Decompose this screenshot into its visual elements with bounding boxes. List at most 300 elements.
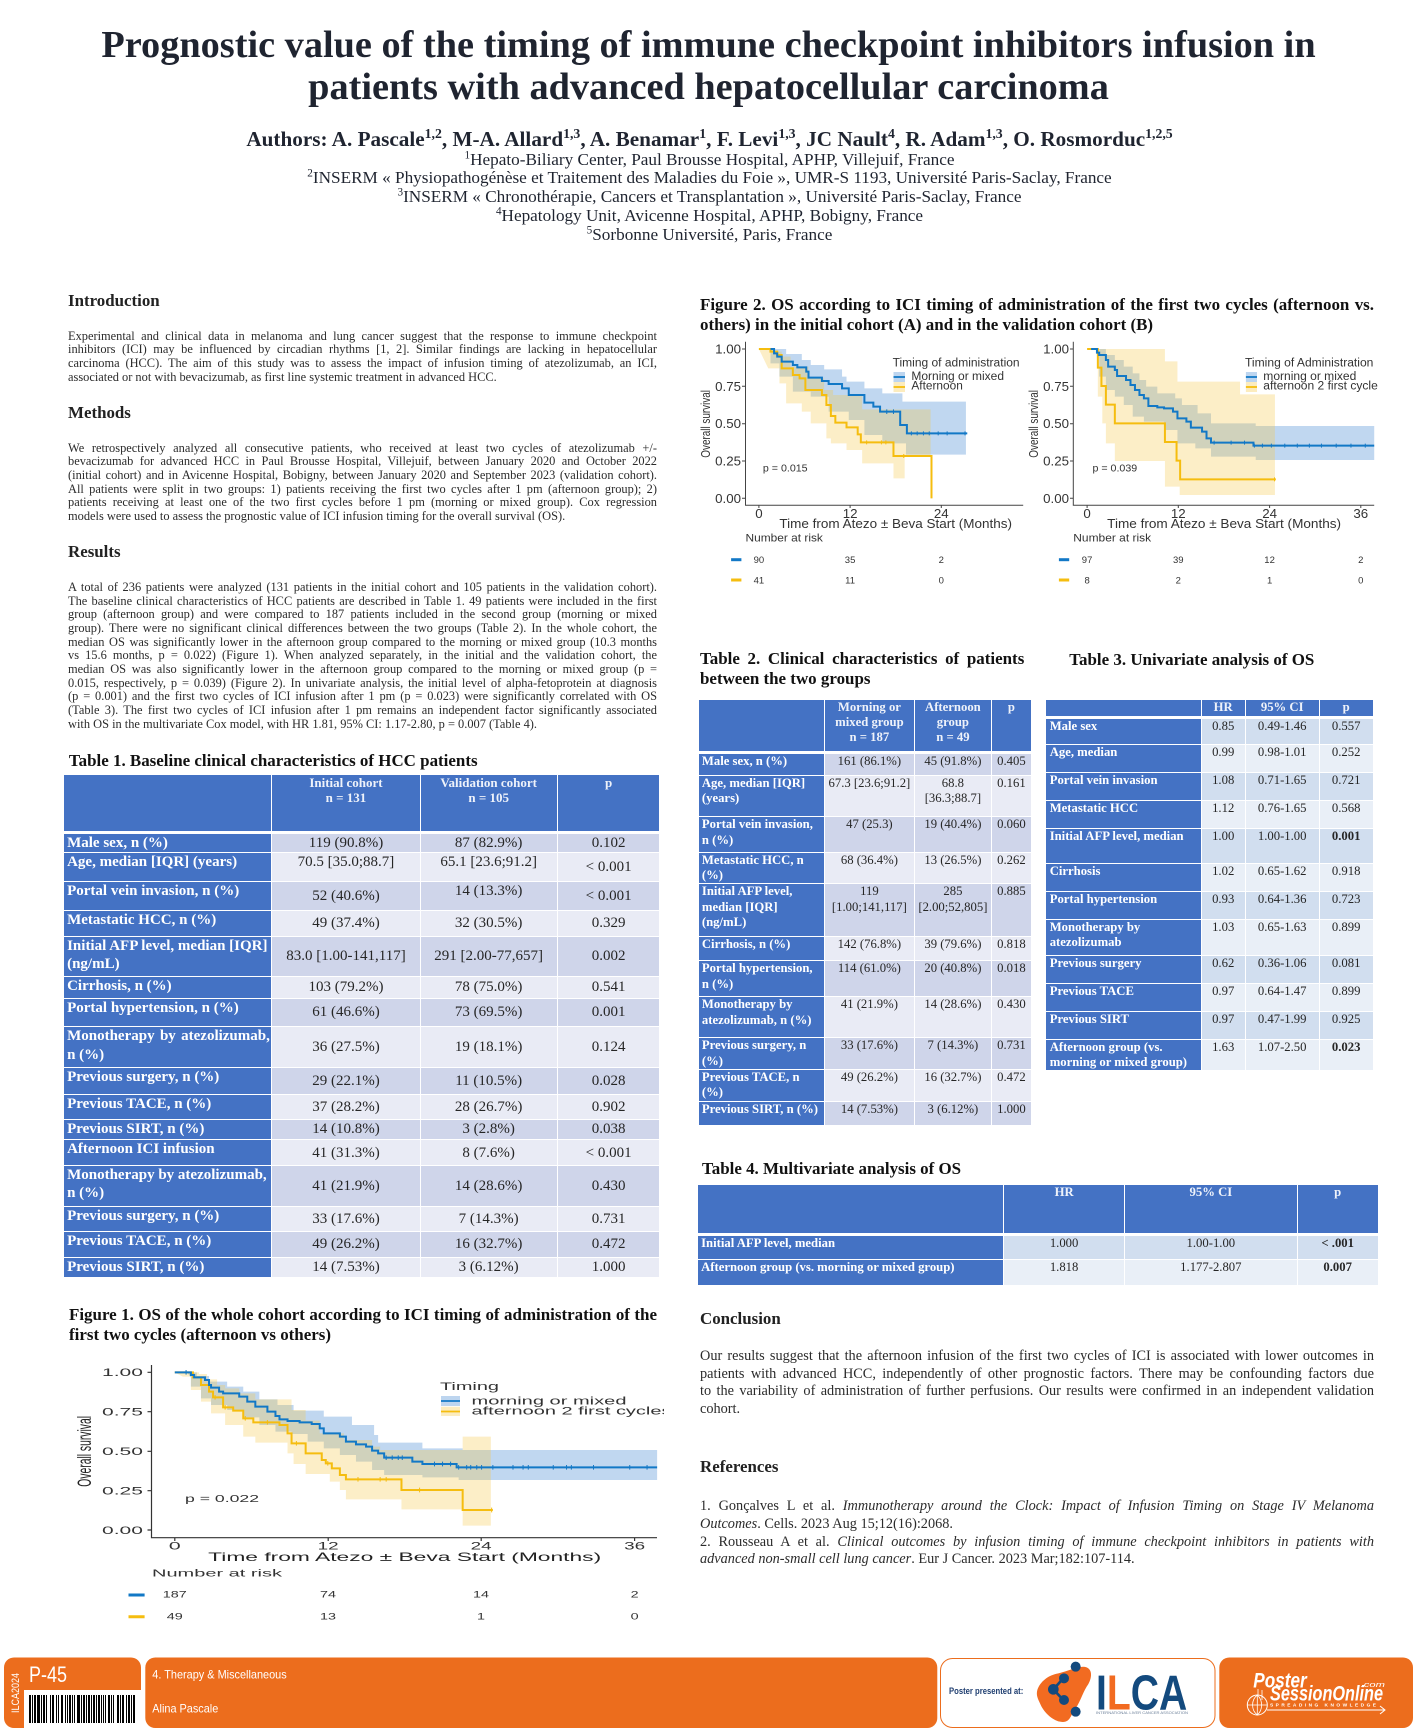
caption: figure 1: Figure 1. OS of the whole cohort according to ICI timing of administration of the — [69, 1305, 657, 1324]
caption: figure 2 — [700, 295, 1374, 334]
caption: table 1: Table 1. Baseline clinical characteristics of HCC patients — [69, 751, 478, 770]
table 1: baseline characteristics: Initial cohort — [309, 775, 383, 790]
heading: references: References — [700, 1457, 778, 1476]
risk table: figure 1: 74 — [320, 1590, 336, 1601]
text: conclusion — [700, 1348, 1374, 1417]
table 1: baseline characteristics: Initial AFP level, median [IQR] — [67, 938, 268, 954]
legend: panel A: Afternoon — [911, 381, 963, 393]
table 2: clinical characteristics between groups: 0.430 — [997, 997, 1026, 1011]
table 3: univariate analysis: 0.47-1.99 — [1258, 1012, 1306, 1026]
table 3: univariate analysis: 1.00-1.00 — [1258, 829, 1306, 843]
table 3: univariate analysis: 1.00 — [1212, 829, 1234, 843]
table 1: baseline characteristics: Previous TACE, n (%) — [67, 1096, 211, 1112]
table 1: baseline characteristics: 52 (40.6%) — [312, 888, 380, 904]
table 1: baseline characteristics: Previous TACE, n (%) — [67, 1233, 211, 1249]
table 4: multivariate analysis: HR — [1055, 1184, 1074, 1198]
table 2: clinical characteristics between groups — [699, 700, 1031, 1125]
caption: table 4: Table 4. Multivariate analysis of OS — [702, 1159, 961, 1178]
chart: figure 2 survival curves — [700, 342, 1378, 586]
risk table: panel A: 35 — [845, 555, 855, 566]
table 1: baseline characteristics: 119 (90.8%) — [309, 835, 383, 851]
table 1: baseline characteristics: 0.102 — [592, 835, 625, 851]
heading: conclusion: Conclusion — [700, 1309, 781, 1328]
title: patients with advanced hepatocellular carcinoma — [308, 66, 1109, 108]
footer: poster id box — [4, 1658, 141, 1728]
axis labels: panel A: 0.75 — [715, 379, 741, 394]
axis labels: panel A — [699, 342, 1012, 531]
table 2: clinical characteristics between groups: 7 (14.3%) — [928, 1038, 978, 1052]
axis labels: panel A: p = 0.015 — [763, 463, 808, 474]
axis labels: panel A: 0.00 — [715, 491, 741, 506]
table 3: univariate analysis: 0.557 — [1332, 719, 1360, 733]
axis labels: panel A: 0.25 — [715, 454, 741, 468]
table 2: clinical characteristics between groups: (%) — [702, 868, 723, 882]
table 1: baseline characteristics: 0.038 — [592, 1121, 625, 1137]
axis labels: panel B: 0.75 — [1043, 379, 1069, 394]
table 1: baseline characteristics: 0.902 — [592, 1099, 625, 1115]
table 1: baseline characteristics: < 0.001 — [586, 888, 632, 904]
table 3: univariate analysis: 0.899 — [1332, 920, 1360, 934]
caption: figure 2: Figure 2. OS according to ICI timing of administration of the first two cycles (afternoon vs. — [700, 295, 1374, 314]
table 1: baseline characteristics: Previous surgery, n (%) — [67, 1069, 219, 1085]
risk table: panel A: 11 — [845, 575, 855, 586]
text: results: group). There were no significant clinical differences between the two groups (Table 2). In the whole cohort, the — [68, 621, 657, 635]
text: conclusion: patients with advanced HCC, independently of other prognostic factors. There may be confounding factors due — [700, 1366, 1374, 1382]
risk table: figure 1: 14 — [473, 1590, 489, 1601]
heading: methods: Methods — [68, 403, 131, 422]
table 1: baseline characteristics: 0.028 — [592, 1073, 625, 1089]
table 1: baseline characteristics: Afternoon ICI infusion — [67, 1141, 215, 1157]
footer: PosterSessionOnline logo box: Poster — [1253, 1670, 1308, 1693]
table 1: baseline characteristics: Metastatic HCC, n (%) — [67, 912, 216, 928]
axis labels: figure 1: Overall survival — [74, 1416, 96, 1487]
axis labels: figure 1: 12 — [318, 1540, 339, 1552]
axis labels: panel B: 0 — [1083, 506, 1091, 521]
table 2: clinical characteristics between groups: 285 — [943, 884, 962, 898]
table 1: baseline characteristics: 32 (30.5%) — [455, 915, 522, 931]
risk table: panel B: 12 — [1264, 555, 1275, 566]
table 1: baseline characteristics: p — [605, 775, 612, 790]
table 1: baseline characteristics: 0.731 — [592, 1211, 625, 1227]
risk table: figure 1: 49 — [167, 1611, 183, 1622]
table 2: clinical characteristics between groups: 47 (25.3) — [846, 817, 893, 831]
risk table: panel B: 39 — [1173, 555, 1184, 566]
axis labels: figure 1: 0.50 — [102, 1446, 143, 1458]
axis labels: figure 1: 0.00 — [102, 1525, 143, 1537]
axes: figure 1 — [148, 1365, 657, 1541]
table 1: baseline characteristics: Monotherapy by atezolizumab, — [67, 1167, 267, 1183]
table 4: multivariate analysis: Initial AFP level, median — [701, 1236, 835, 1250]
footer: category and presenter box — [145, 1658, 937, 1728]
text: results: median OS was also significantly lower in the afternoon group compared to the morning or mixed group (p = — [68, 662, 657, 676]
risk table: panel B — [1059, 533, 1363, 586]
table 3: univariate analysis: 0.723 — [1332, 892, 1360, 906]
table 2: clinical characteristics between groups: 142 (76.8%) — [838, 937, 901, 951]
text: methods: We retrospectively analyzed all consecutive patients, who received at least two cycles of atezolizumab +/- — [68, 440, 657, 454]
table 1: baseline characteristics: Previous SIRT, n (%) — [67, 1259, 204, 1275]
caption: table 3: Table 3. Univariate analysis of OS — [1069, 650, 1314, 669]
table 2: clinical characteristics between groups: 161 (86.1%) — [838, 754, 901, 768]
table 3: univariate analysis: Metastatic HCC — [1050, 801, 1138, 815]
table 3: univariate analysis: 0.97 — [1212, 984, 1234, 998]
text: conclusion: Our results suggest that the afternoon infusion of the first two cycles of ICI is associated with lower outcomes in — [700, 1348, 1374, 1364]
table 3: univariate analysis: 0.76-1.65 — [1258, 801, 1306, 815]
heading: results: Results — [68, 542, 121, 561]
risk table: figure 1: 13 — [320, 1611, 336, 1622]
table 3: univariate analysis: Monotherapy by — [1050, 920, 1140, 934]
table 1: baseline characteristics: 291 [2.00-77,657] — [434, 948, 543, 964]
axis labels: panel B: 1.00 — [1043, 342, 1069, 356]
risk table: panel A: 90 — [754, 555, 764, 566]
table 2: clinical characteristics between groups: 0.472 — [997, 1070, 1026, 1084]
table 3: univariate analysis: 0.64-1.36 — [1258, 892, 1306, 906]
table 2: clinical characteristics between groups: (years) — [702, 791, 739, 805]
table 2: clinical characteristics between groups: group — [937, 715, 969, 729]
affiliations: 2INSERM « Physiopathogénèse et Traitement des Maladies du Foie », UMR-S 1193, Université Paris-Saclay, France — [307, 168, 1112, 187]
table 2: clinical characteristics between groups: (%) — [702, 1054, 723, 1068]
table 1: baseline characteristics: 14 (28.6%) — [455, 1178, 522, 1194]
table 3: univariate analysis: 1.63 — [1212, 1040, 1234, 1054]
table 4: multivariate analysis: 1.00-1.00 — [1187, 1236, 1235, 1250]
table 4: multivariate analysis: p — [1334, 1184, 1341, 1198]
axis labels: panel A: 0 — [755, 506, 763, 521]
table 1: baseline characteristics: 41 (21.9%) — [312, 1178, 380, 1194]
table 1: baseline characteristics: 83.0 [1.00-141,117] — [286, 948, 406, 964]
risk table: figure 1: 0 — [631, 1611, 639, 1622]
chart: figure 1 survival curves — [74, 1365, 664, 1622]
table 1: baseline characteristics: 3 (6.12%) — [459, 1259, 519, 1275]
caption: table 2: Table 2. Clinical characteristics of patients — [700, 649, 1024, 668]
affiliations — [307, 149, 1112, 244]
table 1: baseline characteristics: 49 (26.2%) — [312, 1236, 380, 1252]
table 2: clinical characteristics between groups: 0.885 — [997, 884, 1026, 898]
affiliations: 5Sorbonne Université, Paris, France — [587, 224, 832, 244]
text: results: median OS was significantly lower in the afternoon group compared to the morning or mixed group (10.3 months — [68, 635, 657, 649]
table 2: clinical characteristics between groups: Male sex, n (%) — [702, 754, 787, 768]
table 1: baseline characteristics: < 0.001 — [586, 859, 632, 875]
text: references: Outcomes. Cells. 2023 Aug 15;12(16):2068. — [700, 1516, 953, 1532]
table 4: multivariate analysis: 1.818 — [1050, 1260, 1078, 1274]
curves: figure 1 — [175, 1370, 657, 1526]
axis labels: figure 1: 0.75 — [102, 1406, 143, 1418]
risk table: panel B: 0 — [1358, 575, 1363, 586]
table 2: clinical characteristics between groups: Metastatic HCC, n — [702, 853, 804, 867]
table 3: univariate analysis: Previous surgery — [1050, 956, 1141, 970]
text: results: The baseline clinical characteristics of HCC patients are described in Table 1. 49 patients were included in the first — [68, 594, 657, 608]
table 4: multivariate analysis: 95% CI — [1190, 1184, 1232, 1198]
table 2: clinical characteristics between groups: Portal vein invasion, — [702, 817, 813, 831]
table 2: clinical characteristics between groups: (%) — [702, 1085, 723, 1099]
table 2: clinical characteristics between groups: 19 (40.4%) — [924, 817, 981, 831]
table 1: baseline characteristics: 1.000 — [592, 1259, 625, 1275]
table 4: multivariate analysis: 0.007 — [1323, 1260, 1352, 1274]
table 2: clinical characteristics between groups: n (%) — [702, 833, 733, 847]
table 2: clinical characteristics between groups: Age, median [IQR] — [702, 776, 805, 790]
table 1: baseline characteristics: n = 131 — [326, 790, 366, 805]
table 1: baseline characteristics: n (%) — [67, 1047, 104, 1063]
table 2: clinical characteristics between groups: [1.00;141,117] — [832, 900, 907, 914]
caption: figure 1 — [69, 1305, 657, 1344]
text: methods: (initial cohort) and in Avicenne Hospital, Bobigny, between January 2020 and September 2023 (validation cohort). — [68, 468, 657, 482]
footer: ILCA logo box: ILCA — [1096, 1666, 1187, 1720]
text: introduction — [68, 329, 657, 384]
footer: PosterSessionOnline logo box: SessionOnline — [1270, 1683, 1383, 1706]
footer: PosterSessionOnline logo box: SPREADING KNOWLEDGE — [1270, 1702, 1377, 1708]
axis labels: panel B: 24 — [1262, 506, 1277, 521]
table 2: clinical characteristics between groups: Previous SIRT, n (%) — [702, 1102, 818, 1116]
table 2: clinical characteristics between groups: 20 (40.8%) — [924, 961, 981, 975]
axis labels: panel B: 0.00 — [1043, 491, 1069, 506]
table 1: baseline characteristics: 0.430 — [592, 1178, 625, 1194]
table 2: clinical characteristics between groups: 13 (26.5%) — [924, 853, 981, 867]
table 1: baseline characteristics: 11 (10.5%) — [455, 1073, 522, 1089]
table 1: baseline characteristics: 14 (10.8%) — [312, 1121, 380, 1137]
table 1: baseline characteristics: Portal hypertension, n (%) — [67, 1000, 239, 1016]
table 3: univariate analysis: HR — [1214, 700, 1233, 714]
axis labels: figure 1: 0.25 — [102, 1486, 143, 1498]
table 2: clinical characteristics between groups: 0.018 — [997, 961, 1026, 975]
authors: Authors: A. Pascale1,2, M-A. Allard1,3, A. Benamar1, F. Levi1,3, JC Nault4, R. Adam1,3, O. Rosmorduc1,2,5 — [246, 126, 1173, 151]
table 3: univariate analysis: 0.93 — [1212, 892, 1234, 906]
table 2: clinical characteristics between groups: 14 (7.53%) — [841, 1102, 898, 1116]
legend: panel B — [1245, 358, 1378, 393]
axis labels: panel A: 0.50 — [715, 416, 741, 431]
table 1: baseline characteristics: Cirrhosis, n (%) — [67, 978, 172, 994]
table 3: univariate analysis: 0.899 — [1332, 984, 1360, 998]
table 1: baseline characteristics: Male sex, n (%) — [67, 835, 168, 851]
table 1: baseline characteristics: 0.124 — [592, 1039, 625, 1055]
table 3: univariate analysis: 0.721 — [1332, 773, 1360, 787]
text: results: A total of 236 patients were analyzed (131 patients in the initial cohort and 105 patients in the validation cohort). — [68, 580, 657, 594]
legend: figure 1: afternoon 2 first cycles — [472, 1406, 664, 1418]
table 1: baseline characteristics: 0.472 — [592, 1236, 625, 1252]
curves: panel A — [759, 349, 967, 498]
barcode — [29, 1695, 135, 1723]
table 1: baseline characteristics: 36 (27.5%) — [312, 1039, 380, 1055]
axis labels: panel B: 0.25 — [1043, 454, 1069, 468]
icon: ILCA logo mark — [1037, 1662, 1091, 1722]
risk table: panel B: 2 — [1176, 575, 1181, 586]
legend: panel A: Timing of administration — [893, 358, 1020, 370]
heading: introduction: Introduction — [68, 291, 160, 310]
table 1: baseline characteristics: 0.002 — [592, 948, 625, 964]
text: results: with OS in the multivariate Cox model, with HR 1.81, 95% CI: 1.17-2.80, p = 0.007 (Table 4). — [68, 717, 537, 731]
table 3: univariate analysis: 1.03 — [1212, 920, 1234, 934]
table 1: baseline characteristics: < 0.001 — [586, 1145, 632, 1161]
table 1: baseline characteristics: 29 (22.1%) — [312, 1073, 380, 1089]
axes: panel A — [742, 342, 1023, 508]
risk table: figure 1 — [128, 1568, 639, 1622]
text: references: 1. Gonçalves L et al. Immunotherapy around the Clock: Impact of Infusion Timing on Stage IV Melanoma — [700, 1498, 1374, 1514]
text: introduction: carcinoma (HCC). The aim of this study was to assess the impact of infusion timing of atezolizumab, an ICI, — [68, 356, 657, 370]
risk table: panel B: Number at risk — [1073, 533, 1152, 545]
axis labels: panel B: Time from Atezo ± Beva Start (Months) — [1107, 516, 1341, 531]
text: methods: bevacizumab for advanced HCC in Paul Brousse Hospital, Villejuif, between January 2020 and October 2022 — [68, 454, 657, 468]
caption: table 2: between the two groups — [700, 669, 870, 688]
table 2: clinical characteristics between groups: 16 (32.7%) — [924, 1070, 981, 1084]
risk table: figure 1: 2 — [631, 1590, 639, 1601]
axis labels: figure 1: 36 — [624, 1540, 645, 1552]
table 2: clinical characteristics between groups: n = 49 — [936, 730, 970, 744]
footer: poster id box: ILCA2024 — [10, 1673, 22, 1713]
axis labels: panel A: 24 — [934, 506, 949, 521]
risk table: panel A: 2 — [939, 555, 944, 566]
table 3: univariate analysis: Previous TACE — [1050, 984, 1134, 998]
legend: figure 1: Timing — [440, 1381, 499, 1393]
axis labels: panel B: 12 — [1171, 506, 1186, 521]
table 1: baseline characteristics: 103 (79.2%) — [308, 979, 383, 995]
table 3: univariate analysis — [1046, 700, 1373, 1070]
text: methods: models were used to assess the prognostic value of ICI infusion timing for the overall survival (OS). — [68, 509, 565, 523]
table 3: univariate analysis: Age, median — [1050, 745, 1117, 759]
footer: ILCA logo box — [940, 1658, 1215, 1728]
table 1: baseline characteristics: Monotherapy by atezolizumab, — [67, 1028, 270, 1044]
table 1: baseline characteristics: Validation cohort — [440, 775, 537, 790]
text: methods: patients receiving at least one of the two first cycles before 1 pm (morning or mixed group). Cox regression — [68, 495, 657, 509]
axis labels: panel B: 0.50 — [1043, 416, 1069, 431]
table 1: baseline characteristics: (ng/mL) — [67, 956, 120, 972]
table 1: baseline characteristics: n (%) — [67, 1185, 104, 1201]
risk table: panel A: 41 — [754, 575, 764, 586]
table 4: multivariate analysis: Afternoon group (vs. morning or mixed group) — [701, 1260, 955, 1274]
table 2: clinical characteristics between groups: Morning or — [838, 700, 901, 714]
table 1: baseline characteristics: 78 (75.0%) — [455, 979, 522, 995]
affiliations: 3INSERM « Chronothérapie, Cancers et Transplantation », Université Paris-Saclay, France — [397, 186, 1022, 206]
table 4: multivariate analysis — [698, 1184, 1378, 1285]
axis labels: figure 1: 24 — [471, 1540, 492, 1552]
table 2: clinical characteristics between groups: 3 (6.12%) — [928, 1102, 978, 1116]
footer: ILCA logo box: Poster presented at: — [949, 1686, 1023, 1696]
table 2: clinical characteristics between groups: mixed group — [835, 715, 904, 729]
axis labels: panel B: 36 — [1353, 506, 1368, 521]
table 2: clinical characteristics between groups: Portal hypertension, — [702, 961, 813, 975]
footer: category and presenter box: 4. Therapy & Miscellaneous — [152, 1668, 287, 1682]
table 2: clinical characteristics between groups: 41 (21.9%) — [841, 997, 898, 1011]
title: Prognostic value of the timing of immune checkpoint inhibitors infusion in — [101, 24, 1316, 66]
caption: figure 2: others) in the initial cohort (A) and in the validation cohort (B) — [700, 315, 1153, 334]
table 3: univariate analysis: atezolizumab — [1050, 935, 1122, 949]
table 2: clinical characteristics between groups: 33 (17.6%) — [841, 1038, 898, 1052]
table 2: clinical characteristics between groups: 14 (28.6%) — [924, 997, 981, 1011]
table 1: baseline characteristics: 14 (13.3%) — [455, 883, 522, 899]
table 1: baseline characteristics: Age, median [IQR] (years) — [67, 854, 237, 870]
text: references — [700, 1498, 1374, 1567]
table 1: baseline characteristics: 0.001 — [592, 1004, 625, 1020]
table 3: univariate analysis: 0.001 — [1332, 829, 1360, 843]
table 3: univariate analysis: 0.925 — [1332, 1012, 1360, 1026]
axis labels: figure 1: Time from Atezo ± Beva Start (Months) — [208, 1550, 601, 1564]
table 1: baseline characteristics: 70.5 [35.0;88.7] — [298, 854, 394, 870]
text: introduction: Experimental and clinical data in melanoma and lung cancer suggest that the response to immune checkpoint — [68, 329, 657, 343]
table 1: baseline characteristics: 8 (7.6%) — [462, 1145, 515, 1161]
table 3: univariate analysis: 0.85 — [1212, 719, 1234, 733]
table 1: baseline characteristics: 61 (46.6%) — [312, 1004, 380, 1020]
caption: table 2 — [700, 649, 1024, 688]
table 3: univariate analysis: 0.918 — [1332, 864, 1360, 878]
curves: panel B — [1087, 349, 1374, 495]
text: results: group (afternoon group) and were compared to 187 patients included in the second group (morning or mixed — [68, 607, 657, 621]
table 2: clinical characteristics between groups: 67.3 [23.6;91.2] — [828, 776, 910, 790]
table 3: univariate analysis: 0.99 — [1212, 745, 1234, 759]
table 4: multivariate analysis: 1.000 — [1050, 1236, 1078, 1250]
table 1: baseline characteristics: 0.541 — [592, 979, 625, 995]
table 3: univariate analysis: 0.65-1.63 — [1258, 920, 1306, 934]
table 3: univariate analysis: 1.07-2.50 — [1258, 1040, 1306, 1054]
table 3: univariate analysis: p — [1343, 700, 1350, 714]
table 2: clinical characteristics between groups: 68.8 — [942, 776, 964, 790]
table 2: clinical characteristics between groups: 119 — [860, 884, 879, 898]
table 3: univariate analysis: 0.49-1.46 — [1258, 719, 1306, 733]
table 3: univariate analysis: 1.08 — [1212, 773, 1234, 787]
table 3: univariate analysis: 0.081 — [1332, 956, 1360, 970]
text: introduction: inhibitors (ICI) may be influenced by circadian rhythms [1, 2]. Similar findings are lacking in hepatocellular — [68, 342, 657, 356]
legend: panel B: morning or mixed — [1263, 371, 1356, 383]
table 1: baseline characteristics: 28 (26.7%) — [455, 1099, 522, 1115]
table 1: baseline characteristics — [64, 775, 659, 1277]
footer: ILCA logo box: INTERNATIONAL LIVER CANCER ASSOCIATION — [1096, 1711, 1188, 1715]
table 3: univariate analysis: Afternoon group (vs. — [1050, 1040, 1163, 1054]
table 2: clinical characteristics between groups: Previous surgery, n — [702, 1038, 806, 1052]
table 3: univariate analysis: 1.12 — [1212, 801, 1234, 815]
footer: poster id box: P-45 — [29, 1662, 67, 1687]
table 3: univariate analysis: Portal vein invasion — [1050, 773, 1158, 787]
legend: panel B: afternoon 2 first cycle — [1263, 381, 1378, 393]
text: references: advanced non-small cell lung cancer. Eur J Cancer. 2023 Mar;182:107-114. — [700, 1551, 1135, 1567]
risk table: figure 1: Number at risk — [152, 1568, 283, 1580]
axis labels: panel B — [1027, 342, 1368, 531]
table 2: clinical characteristics between groups: Afternoon — [925, 700, 981, 714]
table 2: clinical characteristics between groups: [2.00;52,805] — [918, 900, 987, 914]
text: results: vs 15.6 months, p = 0.022) (Figure 1). When analyzed separately, in the initial and the validation cohort, the — [68, 648, 657, 662]
table 2: clinical characteristics between groups: atezolizumab, n (%) — [702, 1013, 811, 1027]
table 2: clinical characteristics between groups: 49 (26.2%) — [841, 1070, 898, 1084]
table 4: multivariate analysis: 1.177-2.807 — [1180, 1260, 1242, 1274]
table 1: baseline characteristics: 19 (18.1%) — [455, 1039, 522, 1055]
axis labels: figure 1: 1.00 — [102, 1367, 143, 1379]
text: references: 2. Rousseau A et al. Clinical outcomes by infusion timing of immune checkpoint inhibitors in patients with — [700, 1534, 1374, 1550]
axis labels: panel A: Time from Atezo ± Beva Start (Months) — [779, 516, 1012, 531]
table 1: baseline characteristics: 49 (37.4%) — [312, 915, 380, 931]
axes: panel B — [1070, 342, 1374, 508]
table 1: baseline characteristics: 0.329 — [592, 915, 625, 931]
table 1: baseline characteristics: 73 (69.5%) — [455, 1004, 522, 1020]
text: methods — [68, 440, 657, 523]
table 3: univariate analysis: morning or mixed group) — [1050, 1055, 1187, 1069]
text: conclusion: cohort. — [700, 1401, 740, 1417]
table 3: univariate analysis: Male sex — [1050, 719, 1097, 733]
table 2: clinical characteristics between groups: n (%) — [702, 977, 733, 991]
axis labels: panel B: Overall survival — [1027, 390, 1041, 458]
table 1: baseline characteristics: Previous surgery, n (%) — [67, 1208, 219, 1224]
axis labels: panel A: 1.00 — [715, 342, 741, 356]
table 2: clinical characteristics between groups: Monotherapy by — [702, 997, 792, 1011]
table 2: clinical characteristics between groups: (ng/mL) — [702, 915, 746, 929]
table 1: baseline characteristics: n = 105 — [468, 790, 509, 805]
affiliations: 4Hepatology Unit, Avicenne Hospital, APHP, Bobigny, France — [496, 205, 923, 225]
table 4: multivariate analysis: < .001 — [1321, 1236, 1354, 1250]
table 1: baseline characteristics: 16 (32.7%) — [455, 1236, 522, 1252]
table 1: baseline characteristics: 41 (31.3%) — [312, 1145, 380, 1161]
table 2: clinical characteristics between groups: 0.060 — [997, 817, 1026, 831]
table 3: univariate analysis: Cirrhosis — [1050, 864, 1100, 878]
table 1: baseline characteristics: Portal vein invasion, n (%) — [67, 883, 239, 899]
table 3: univariate analysis: 0.62 — [1212, 956, 1234, 970]
risk table: panel A: 0 — [939, 575, 944, 586]
table 3: univariate analysis: 1.02 — [1212, 864, 1234, 878]
table 2: clinical characteristics between groups: median [IQR] — [702, 900, 778, 914]
table 2: clinical characteristics between groups: n = 187 — [850, 730, 889, 744]
table 2: clinical characteristics between groups: 0.262 — [997, 853, 1026, 867]
